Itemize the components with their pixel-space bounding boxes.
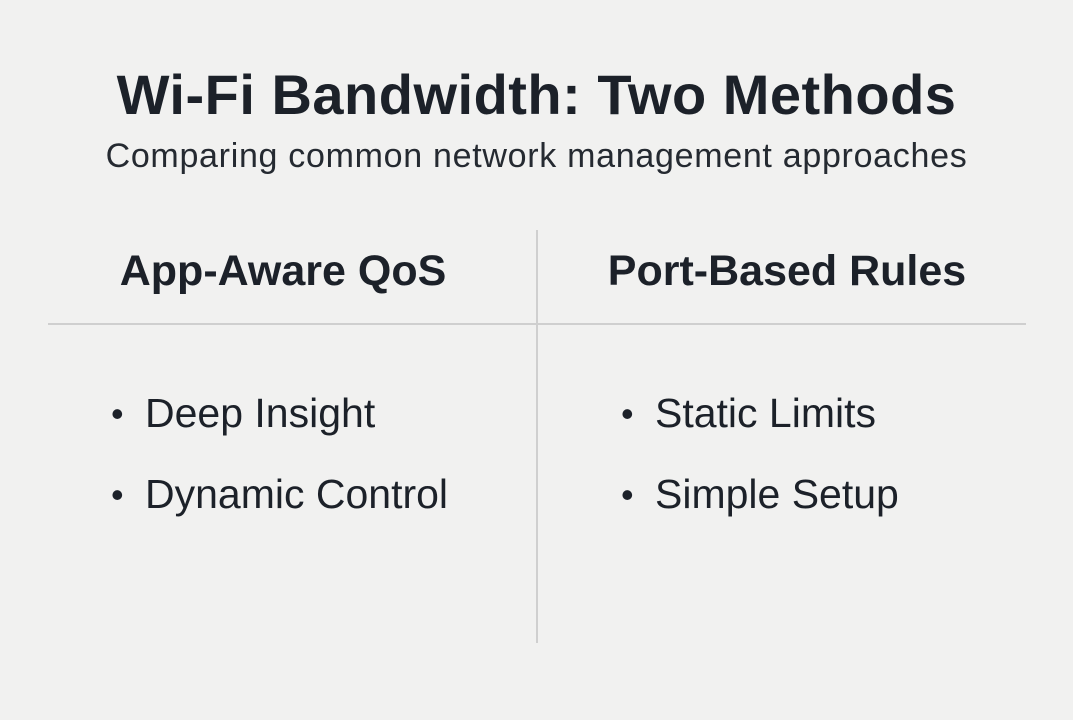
list: port-based: • xyxy=(621,393,634,434)
list: app-aware: Dynamic Control xyxy=(145,471,448,517)
list: app-aware: • xyxy=(111,393,124,434)
title: Wi-Fi Bandwidth: Two Methods xyxy=(117,63,956,126)
list: app-aware xyxy=(111,390,448,517)
list: port-based: • xyxy=(621,474,634,515)
list: port-based: Simple Setup xyxy=(655,471,899,517)
vertical divider xyxy=(536,230,538,643)
list: app-aware: Deep Insight xyxy=(145,390,375,436)
list: port-based xyxy=(621,390,899,517)
subtitle: Comparing common network management approaches xyxy=(106,137,967,175)
list: app-aware: • xyxy=(111,474,124,515)
list: port-based: Static Limits xyxy=(655,390,876,436)
column heading: App-Aware QoS: App-Aware QoS xyxy=(120,247,446,295)
column heading: Port-Based Rules: Port-Based Rules xyxy=(608,247,966,295)
horizontal divider xyxy=(48,323,1026,325)
